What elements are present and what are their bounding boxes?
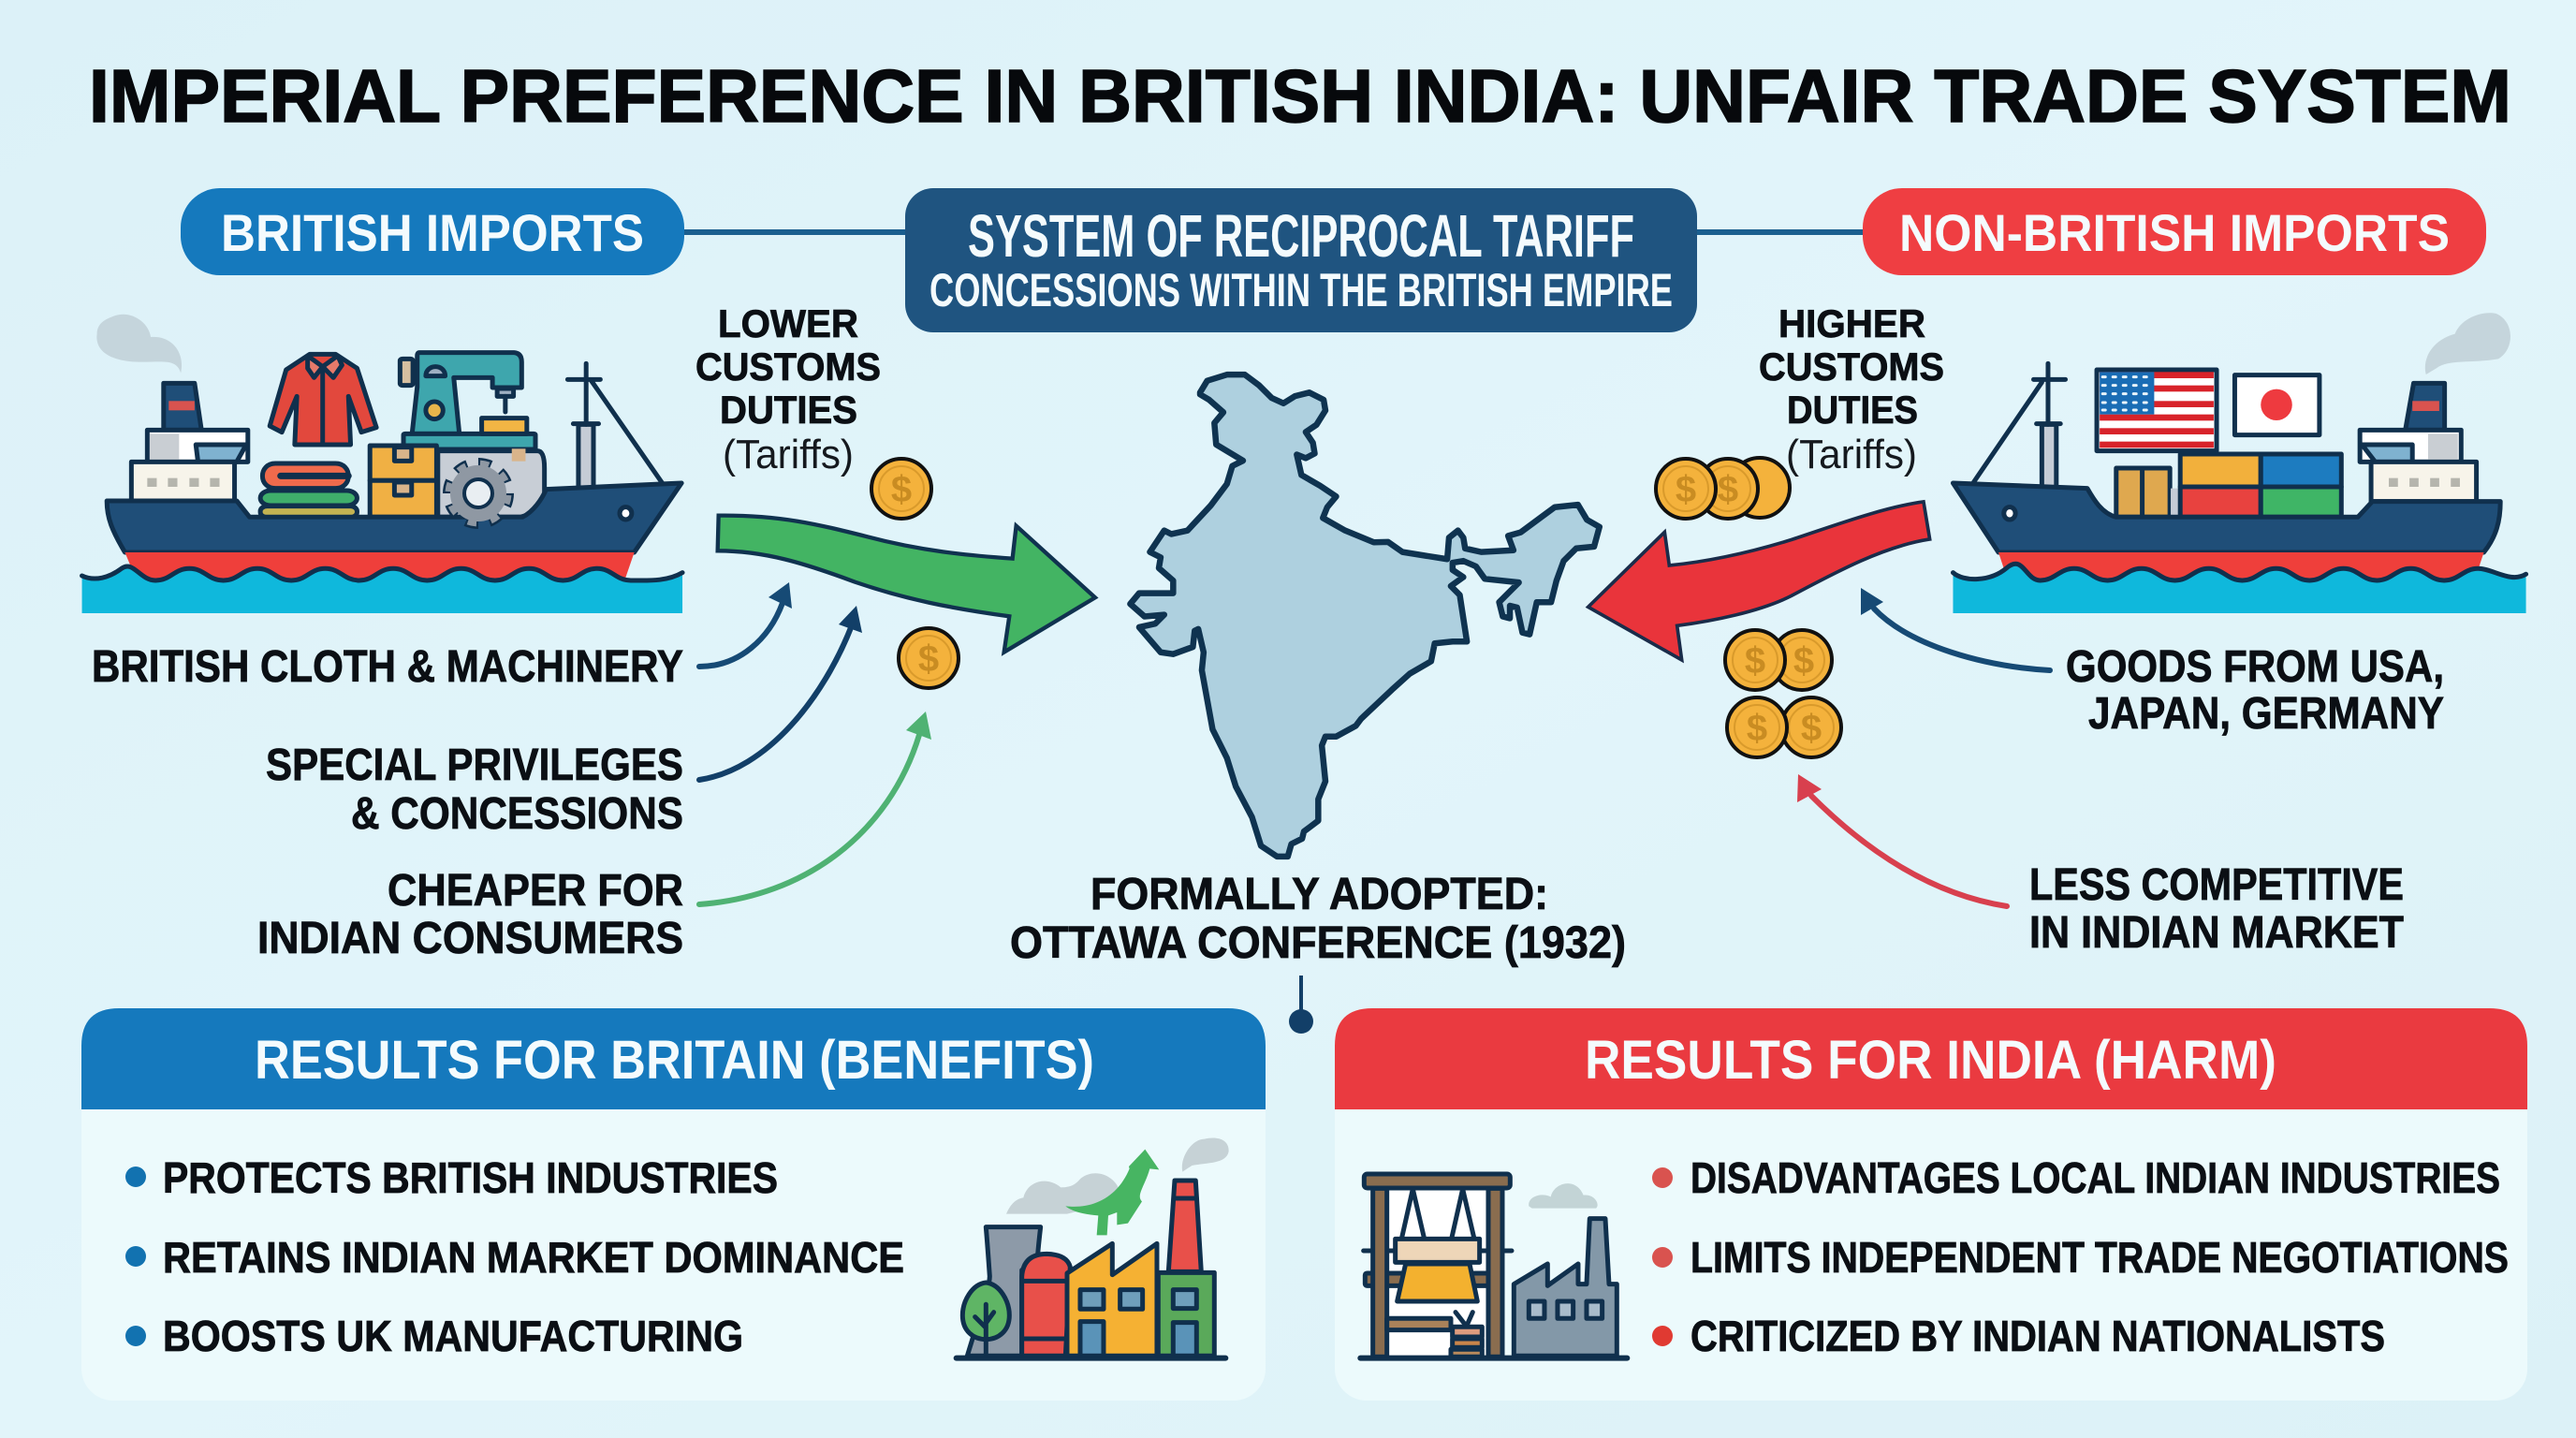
panel: results for India: [1335, 1008, 2527, 1401]
text: lower customs duties: (Tariffs): [723, 432, 854, 477]
text: formally adopted at Ottawa conference: OTTAWA CONFERENCE (1932): [1010, 918, 1626, 968]
banner: system of reciprocal tariff concessions: SYSTEM OF RECIPROCAL TARIFF: [968, 202, 1634, 270]
icon: coin stack above red arrow: [1656, 458, 1790, 519]
panel header: India: [1335, 1008, 2527, 1109]
pill: non-British imports: NON-BRITISH IMPORTS: [1899, 203, 2450, 262]
icon: gear on British ship: [449, 464, 507, 522]
panel: results for Britain: [81, 1008, 1266, 1401]
panel header: Britain: RESULTS FOR BRITAIN (BENEFITS): [255, 1030, 1094, 1091]
pill: non-British imports: [1863, 188, 2486, 275]
text: higher customs duties: CUSTOMS: [1759, 345, 1944, 389]
banner: system of reciprocal tariff concessions: CONCESSIONS WITHIN THE BRITISH EMPIRE: [929, 264, 1673, 316]
text: cheaper for Indian consumers: [257, 866, 683, 963]
text: lower customs duties: DUTIES: [720, 388, 857, 432]
text: goods from USA, Japan, Germany: [2066, 642, 2444, 739]
bullet: protects British industries: PROTECTS BRITISH INDUSTRIES: [163, 1153, 778, 1202]
text: less competitive: IN INDIAN MARKET: [2029, 908, 2404, 958]
pill: British imports: [181, 188, 684, 275]
title: IMPERIAL PREFERENCE IN BRITISH INDIA: UNFAIR TRADE SYSTEM: [89, 54, 2511, 138]
icon: coin below green arrow: [899, 628, 959, 688]
text: special privileges and concessions: & CONCESSIONS: [351, 789, 683, 839]
text: higher customs duties: DUTIES: [1787, 388, 1918, 432]
text: special privileges and concessions: SPECIAL PRIVILEGES: [266, 741, 683, 790]
text: higher customs duties: HIGHER: [1778, 301, 1925, 345]
icon: USA flag: [2097, 370, 2217, 451]
text: cheaper for Indian consumers: CHEAPER FOR: [388, 866, 683, 916]
panel header: India: RESULTS FOR INDIA (HARM): [1585, 1030, 2276, 1091]
icon: British cargo ship: [82, 315, 682, 613]
text: lower customs duties: CUSTOMS: [695, 345, 881, 389]
icon: coin below green arrow: $: [918, 638, 939, 680]
text: lower customs duties: LOWER: [718, 301, 858, 345]
arrow: less competitive to coins: [1797, 774, 2007, 906]
arrow: goods to red arrow: [1861, 588, 2050, 670]
text: less competitive: [2029, 860, 2404, 958]
text: special privileges and concessions: [266, 741, 683, 839]
arrow: cloth to green arrow: [699, 582, 792, 667]
icon: coin stack below red arrow: $: [1801, 708, 1822, 749]
text: goods from USA, Japan, Germany: GOODS FROM USA,: [2066, 642, 2444, 692]
arrow: green low tariff arrow to India: [718, 516, 1095, 653]
icon: coin stack below red arrow: $: [1793, 640, 1814, 682]
bullet: criticized by Indian nationalists: CRITICIZED BY INDIAN NATIONALISTS: [1690, 1312, 2385, 1360]
text: formally adopted at Ottawa conference: FORMALLY ADOPTED:: [1090, 870, 1548, 919]
banner: system of reciprocal tariff concessions: [905, 188, 1697, 332]
connector pin: [1289, 976, 1313, 1034]
icon: coin above green arrow: [871, 459, 931, 519]
text: higher customs duties: [1759, 301, 1944, 477]
text: less competitive: LESS COMPETITIVE: [2029, 860, 2404, 910]
text: goods from USA, Japan, Germany: JAPAN, GERMANY: [2088, 689, 2444, 739]
arrow: privileges to green arrow: [699, 606, 862, 780]
bullet: boosts UK manufacturing: BOOSTS UK MANUFACTURING: [163, 1312, 743, 1360]
icon: coin stack below red arrow: $: [1747, 708, 1767, 749]
connector line: header row: [679, 229, 1867, 235]
icon: foreign cargo ship: [1953, 313, 2526, 613]
map: India: [1130, 374, 1600, 857]
arrow: red high tariff arrow to India: [1588, 502, 1930, 660]
icon: Indian loom and factory: [1360, 1174, 1627, 1358]
icon: coin stack below red arrow: $: [1745, 640, 1765, 682]
icon: coin stack above red arrow: $: [1718, 469, 1738, 510]
text: cheaper for Indian consumers: INDIAN CONSUMERS: [257, 914, 683, 963]
text: higher customs duties: (Tariffs): [1786, 432, 1917, 477]
bullet: retains Indian market dominance: RETAINS INDIAN MARKET DOMINANCE: [163, 1233, 904, 1282]
text: British cloth and machinery: BRITISH CLOTH & MACHINERY: [92, 642, 683, 692]
icon: Japan flag: [2234, 375, 2320, 435]
text: formally adopted at Ottawa conference: [1010, 870, 1626, 968]
panel header: Britain: [81, 1008, 1266, 1109]
icon: coin stack above red arrow: $: [1676, 469, 1696, 510]
icon: coin above green arrow: $: [891, 469, 912, 510]
pill: British imports: BRITISH IMPORTS: [221, 203, 644, 262]
icon: British factory: [957, 1137, 1229, 1358]
arrow: cheaper to coin: [699, 712, 931, 904]
text: lower customs duties: [695, 301, 881, 477]
icon: coin stack below red arrow: [1725, 630, 1841, 757]
